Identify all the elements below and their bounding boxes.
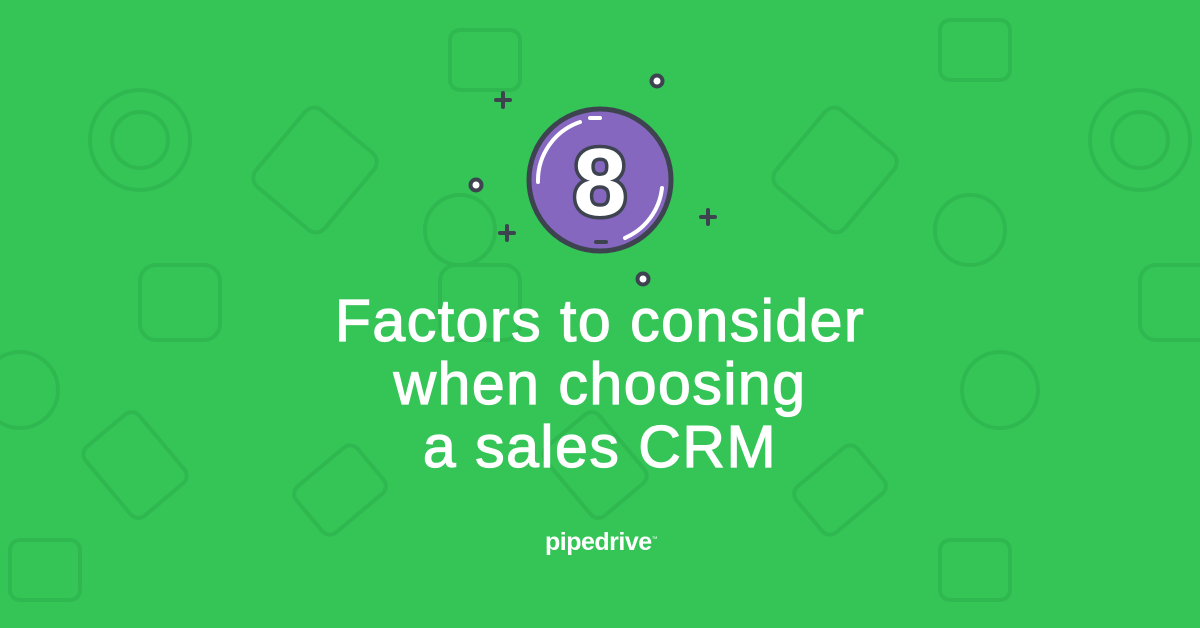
icon: number 8 ball with sparkles	[468, 74, 717, 286]
icon: number 8 ball with sparkles: 8	[573, 129, 627, 236]
title: a sales CRM	[423, 414, 777, 480]
title: when choosing	[393, 351, 807, 417]
ball	[529, 109, 671, 251]
title	[335, 288, 865, 480]
sparkles	[470, 76, 715, 284]
title: Factors to consider	[335, 288, 865, 354]
logo: pipedrive: pipedrive™	[545, 528, 657, 556]
